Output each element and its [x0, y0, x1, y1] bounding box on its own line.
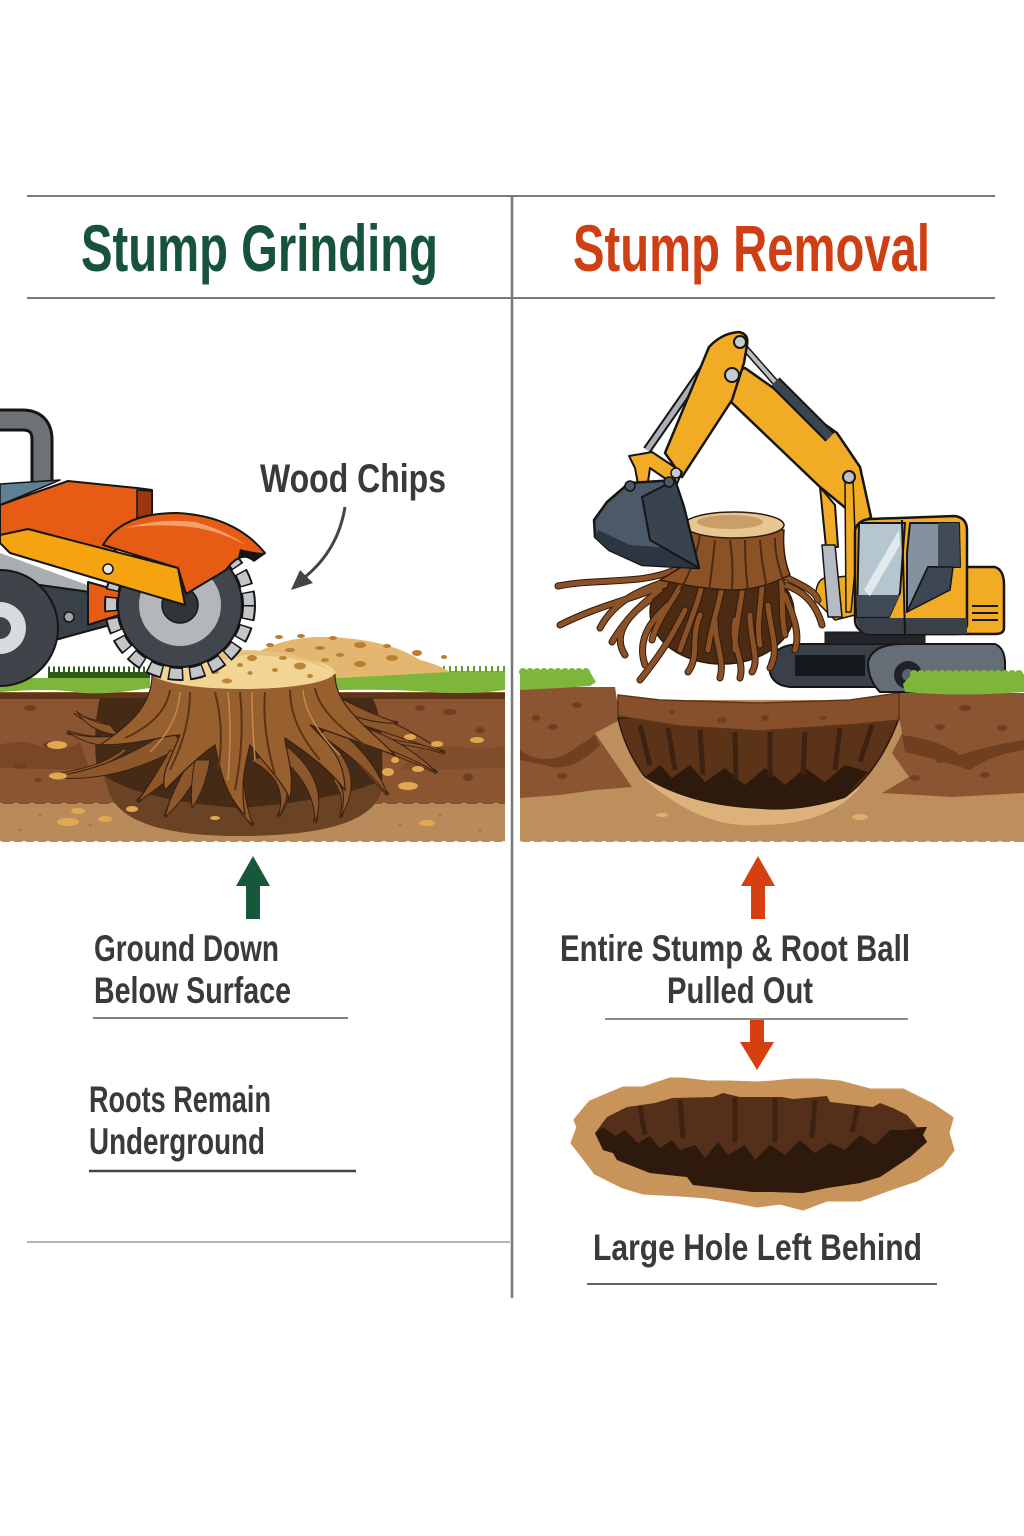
grinder machine — [0, 420, 265, 686]
text: ground down: Ground Down — [94, 928, 279, 969]
orange lower guard — [88, 582, 160, 625]
grass patch: right — [903, 674, 1024, 694]
hydraulic stick cylinder — [647, 368, 704, 450]
text: entire stump: Pulled Out — [667, 970, 813, 1011]
dark stump pit — [95, 698, 382, 836]
wood chips label: Wood Chips — [260, 457, 446, 501]
ground cross-section: left — [0, 692, 505, 845]
text: ground down — [93, 928, 348, 1018]
grass strips — [0, 669, 505, 693]
boom — [725, 368, 871, 530]
engine / counterweight — [815, 575, 860, 620]
text: roots remain: Underground — [89, 1121, 265, 1162]
arrow: to wood chips — [291, 507, 345, 590]
excavated pit — [618, 693, 899, 809]
text: roots remain — [89, 1079, 356, 1171]
text: large hole left behind: Large Hole Left Behind — [593, 1227, 922, 1268]
panel: stump removal illustration — [520, 332, 1024, 845]
text: roots remain: Roots Remain — [89, 1079, 271, 1120]
tracks — [769, 644, 1005, 687]
panel: stump grinding illustration — [0, 420, 505, 845]
wood chip pile — [240, 634, 450, 678]
ground cross-section: right — [520, 687, 1024, 845]
yellow arm — [0, 529, 185, 605]
big wheel — [0, 553, 90, 640]
bucket — [594, 480, 699, 568]
boom lower arm — [820, 487, 838, 547]
handle — [0, 420, 42, 482]
lifted stump — [558, 512, 822, 680]
arrow: red down — [740, 1020, 774, 1070]
orange wheel guard — [103, 513, 265, 594]
linkage — [629, 452, 682, 486]
engine body — [920, 567, 1004, 634]
icon: large hole — [572, 1079, 953, 1209]
excavator — [558, 332, 1005, 692]
hydraulic boom cylinder — [745, 348, 775, 382]
stump and roots — [47, 650, 484, 826]
text: entire stump: Entire Stump & Root Ball — [560, 928, 910, 969]
blue panel — [0, 480, 60, 505]
arrow: green up — [236, 856, 270, 919]
engine housing — [0, 481, 152, 560]
cab — [855, 516, 967, 634]
grass patch: left — [520, 672, 596, 690]
grinding wheel — [111, 536, 249, 674]
arrow: red up — [741, 856, 775, 919]
stick — [665, 332, 747, 477]
text: entire stump — [560, 928, 910, 1019]
heading: Stump Grinding: Stump Grinding — [81, 211, 438, 285]
text: ground down: Below Surface — [94, 970, 291, 1011]
